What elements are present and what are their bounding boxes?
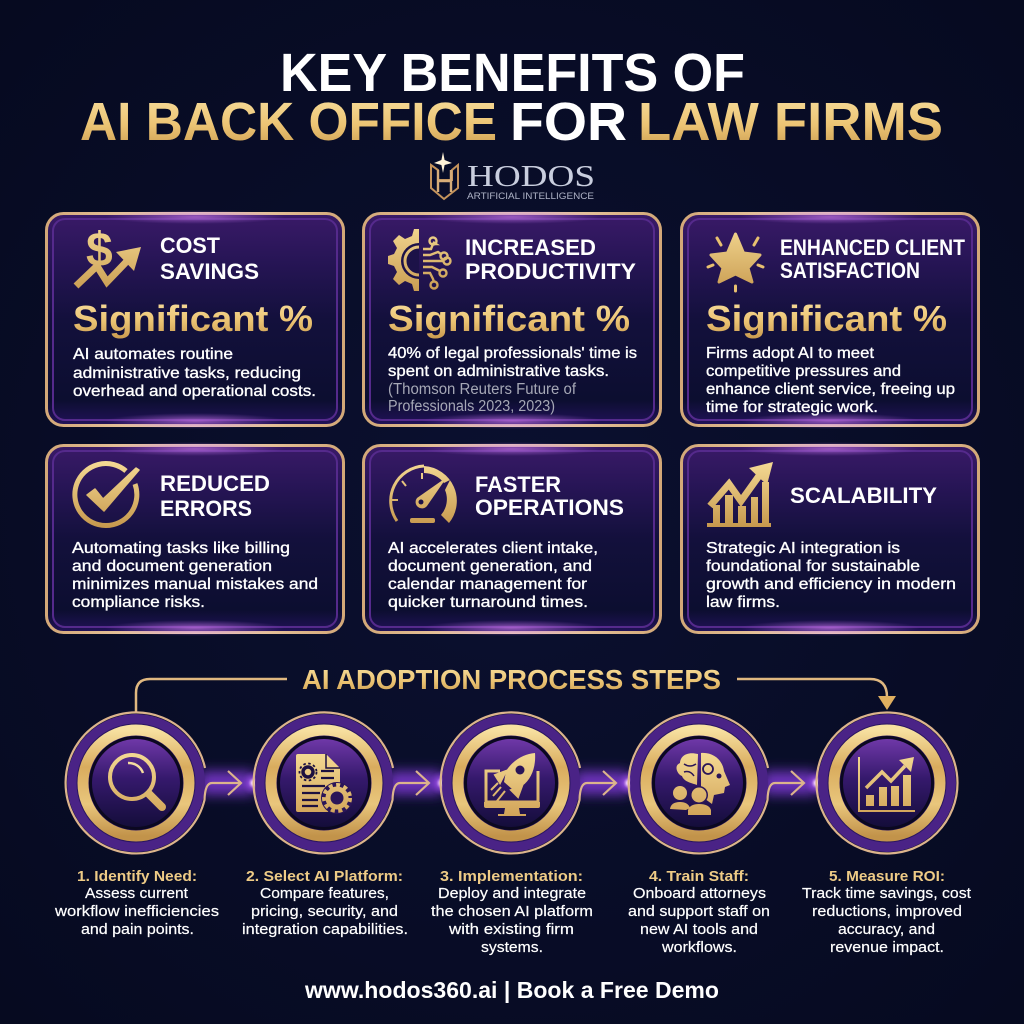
text: description: foundational for sustainable <box>706 558 920 575</box>
text: description: enhance client service, freeing up <box>706 381 955 398</box>
icon: check mark in circle <box>75 464 139 526</box>
caption: step 5: accuracy, and <box>838 921 935 938</box>
text: description <box>388 345 637 380</box>
title: LAW FIRMS <box>638 92 943 152</box>
text: description: spent on administrative tasks. <box>388 363 609 380</box>
text: description: quicker turnaround times. <box>388 594 588 611</box>
heading: cost savings <box>160 233 259 284</box>
caption: step 2 <box>242 868 408 938</box>
caption: step 5: 5. Measure ROI: <box>829 868 945 885</box>
icon: dollar and rising arrow <box>76 224 141 286</box>
caption: step 3 <box>431 868 593 956</box>
icon: dollar and rising arrow: $ <box>86 224 113 277</box>
heading: increased productivity <box>465 235 636 284</box>
caption: step 1: Assess current <box>85 885 189 902</box>
text: description: time for strategic work. <box>706 399 878 416</box>
caption: step 3: Deploy and integrate <box>438 885 586 902</box>
icon: speedometer gauge <box>391 466 457 523</box>
caption: step 5 <box>802 868 972 956</box>
caption: step 5: reductions, improved <box>812 903 962 920</box>
heading: increased productivity: INCREASED <box>465 235 596 260</box>
stat: significant percent: Significant % <box>388 298 630 339</box>
text: description: calendar management for <box>388 576 588 593</box>
text: description: overhead and operational costs. <box>73 383 316 400</box>
heading: scalability: SCALABILITY <box>790 483 937 508</box>
caption: step 4: Onboard attorneys <box>633 885 766 902</box>
text: description <box>72 540 318 611</box>
step 5: chart circle <box>816 712 958 854</box>
glow spot <box>616 770 642 796</box>
icon: head and team <box>670 753 730 815</box>
text: description: compliance risks. <box>72 594 205 611</box>
step 2: document circle <box>254 712 429 853</box>
glow spot <box>804 770 830 796</box>
caption: step 1 <box>54 868 219 938</box>
text: source citation <box>388 381 577 415</box>
caption: step 1: workflow inefficiencies <box>54 903 219 920</box>
arrow: right connector with arrowhead <box>737 679 896 710</box>
caption: step 3: with existing firm <box>448 921 574 938</box>
caption: step 4: and support staff on <box>628 903 770 920</box>
text: description: minimizes manual mistakes and <box>72 576 318 593</box>
icon: bar chart and arrow <box>707 462 773 527</box>
title <box>80 43 943 152</box>
icon: rocket and monitor <box>484 753 540 816</box>
footer: website and call to action: www.hodos360.ai | Book a Free Demo <box>304 977 719 1003</box>
stat: significant percent: Significant % <box>73 298 313 339</box>
heading: enhanced client satisfaction: SATISFACTION <box>780 258 920 283</box>
arrow: left connector line <box>136 679 287 713</box>
text: description <box>73 346 316 400</box>
heading: process steps: AI ADOPTION PROCESS STEPS <box>302 664 721 695</box>
heading: faster operations: OPERATIONS <box>475 495 624 520</box>
logo: Hodos: HODOS <box>467 158 595 193</box>
caption: step 4 <box>628 868 770 956</box>
panel: enhanced client satisfaction <box>682 210 978 429</box>
heading: increased productivity: PRODUCTIVITY <box>465 259 636 284</box>
panel: cost savings <box>46 210 344 429</box>
heading: faster operations <box>475 472 624 520</box>
icon: star <box>708 234 763 291</box>
text: description: growth and efficiency in modern <box>706 576 956 593</box>
heading: reduced errors <box>160 471 270 521</box>
text: description: AI automates routine <box>73 346 233 363</box>
stat: significant percent: Significant % <box>706 298 947 339</box>
text: description <box>388 540 598 611</box>
caption: step 5: Track time savings, cost <box>802 885 972 902</box>
icon: gear and circuit <box>388 229 450 291</box>
caption: step 4: workflows. <box>661 939 737 956</box>
text: description: AI accelerates client intake, <box>388 540 598 557</box>
text: description: Automating tasks like billing <box>72 540 290 557</box>
text: description: Firms adopt AI to meet <box>706 345 875 362</box>
heading: enhanced client satisfaction <box>780 235 965 283</box>
heading: enhanced client satisfaction: ENHANCED CLIENT <box>780 235 965 260</box>
caption: step 2: integration capabilities. <box>242 921 408 938</box>
caption: step 4: new AI tools and <box>640 921 758 938</box>
text: description: Strategic AI integration is <box>706 540 900 557</box>
caption: step 4: 4. Train Staff: <box>649 868 749 885</box>
title: KEY BENEFITS OF <box>280 43 745 103</box>
panel: increased productivity <box>364 210 660 429</box>
panel: faster operations <box>364 442 660 636</box>
caption: step 2: 2. Select AI Platform: <box>246 868 403 885</box>
text: source citation: Professionals 2023, 2023) <box>388 398 555 415</box>
title: AI BACK OFFICE <box>80 92 497 152</box>
caption: step 3: the chosen AI platform <box>431 903 593 920</box>
title: FOR <box>510 92 627 152</box>
text: description: 40% of legal professionals' time is <box>388 345 637 362</box>
panel: scalability <box>682 442 978 636</box>
text: description: competitive pressures and <box>706 363 901 380</box>
text: description <box>706 345 955 416</box>
icon: document with gears <box>296 754 353 814</box>
logo: Hodos <box>431 152 595 202</box>
text: description: law firms. <box>706 594 780 611</box>
connector glows between steps <box>200 771 817 795</box>
panel: reduced errors <box>46 442 344 636</box>
caption: step 1: and pain points. <box>81 921 194 938</box>
heading: reduced errors: ERRORS <box>160 496 252 521</box>
caption: step 2: pricing, security, and <box>251 903 398 920</box>
glow spot <box>241 770 267 796</box>
text: description: document generation, and <box>388 558 592 575</box>
glow spot <box>429 770 455 796</box>
heading: cost savings: SAVINGS <box>160 259 259 284</box>
icon: magnifying glass <box>110 755 162 807</box>
text: description <box>706 540 956 611</box>
text: description: and document generation <box>72 558 272 575</box>
heading: cost savings: COST <box>160 233 221 258</box>
icon: shield with star <box>431 152 458 199</box>
logo: Hodos: ARTIFICIAL INTELLIGENCE <box>467 191 594 202</box>
caption: step 3: 3. Implementation: <box>440 868 583 885</box>
step 3: rocket circle <box>441 712 616 853</box>
heading: faster operations: FASTER <box>475 472 561 497</box>
text: description: administrative tasks, reducing <box>73 365 301 382</box>
caption: step 3: systems. <box>481 939 543 956</box>
caption: step 5: revenue impact. <box>830 939 944 956</box>
caption: step 1: 1. Identify Need: <box>77 868 197 885</box>
caption: step 2: Compare features, <box>260 885 389 902</box>
step 1: magnifier circle <box>66 712 241 853</box>
text: source citation: (Thomson Reuters Future of <box>388 381 577 398</box>
step 4: brain and people circle <box>629 712 804 853</box>
heading: reduced errors: REDUCED <box>160 471 270 496</box>
icon: growth chart <box>858 757 915 812</box>
